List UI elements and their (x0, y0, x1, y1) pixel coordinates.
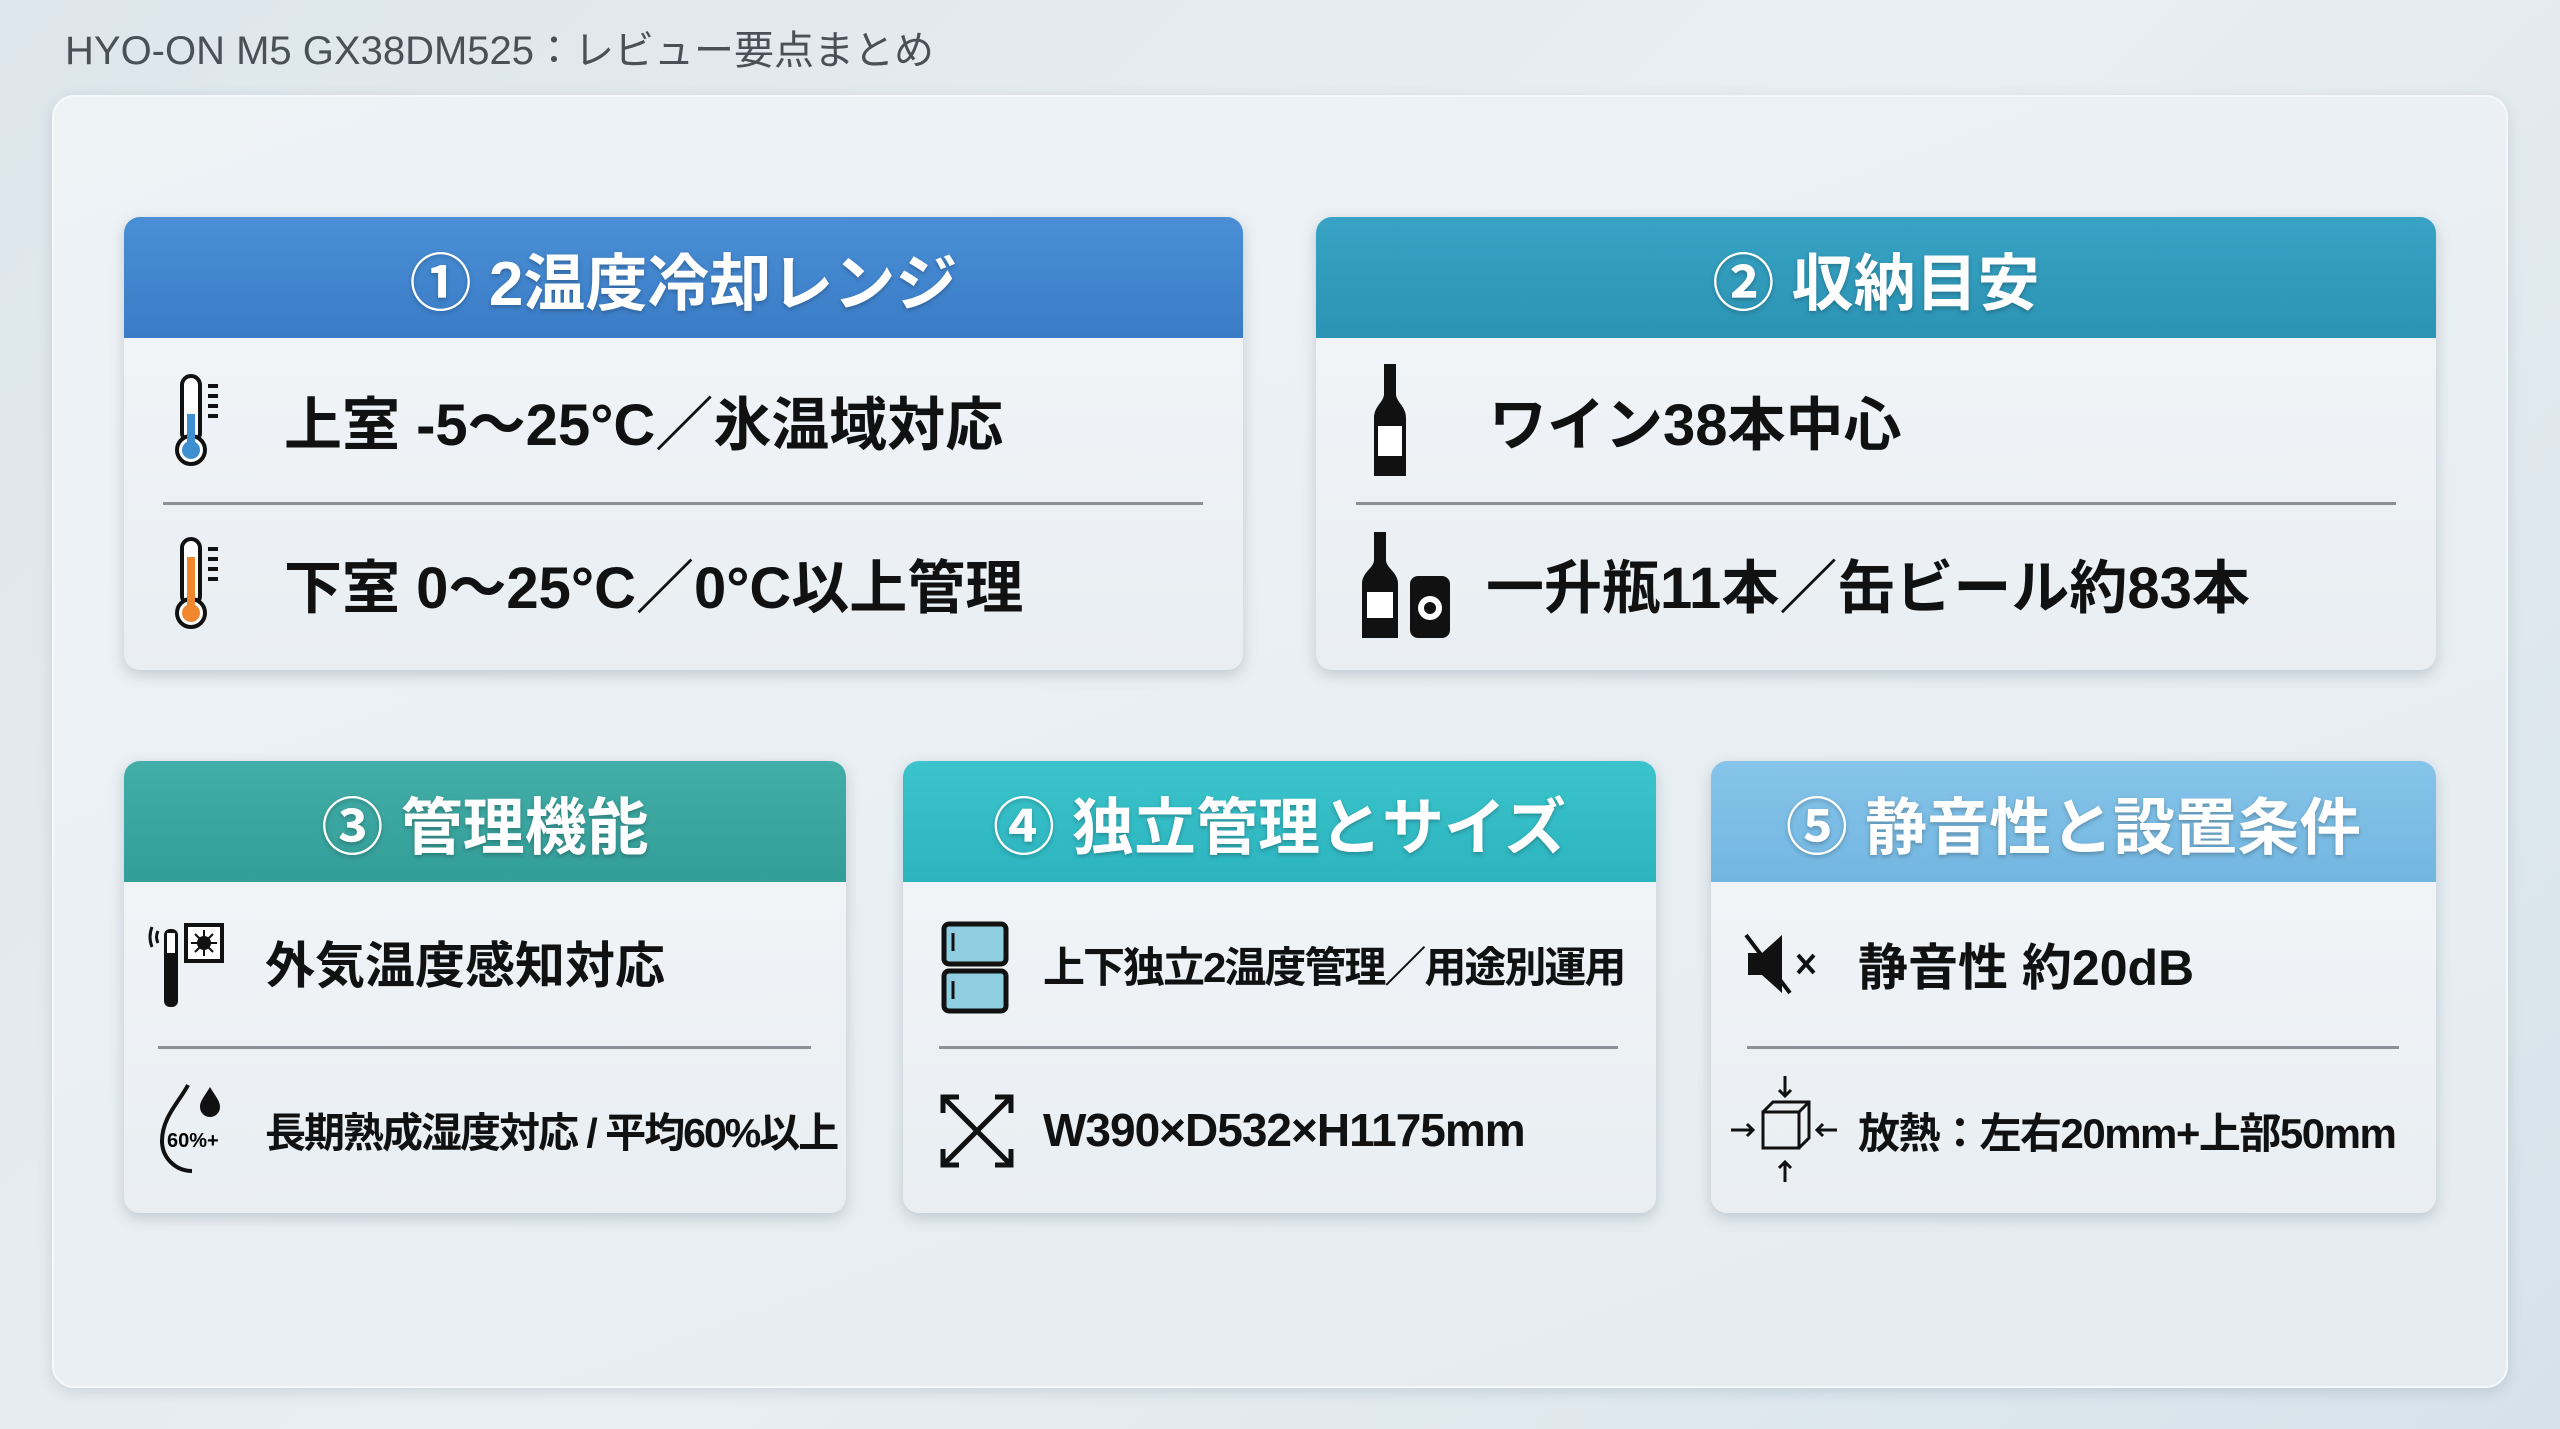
icon: sensor (148, 923, 224, 1007)
icon: mute speaker (1744, 934, 1816, 994)
text: quiet: 静音性 約20dB (1858, 940, 2194, 996)
text: outside temp sensing: 外気温度感知対応 (265, 938, 665, 994)
icon: ventilation box (1731, 1076, 1837, 1182)
text: independent management: 上下独立2温度管理／用途別運用 (1043, 944, 1624, 990)
heading 2: ② 収納目安 (1712, 250, 2040, 318)
text: lower chamber: 下室 0〜25°C／0°C以上管理 (284, 556, 1023, 621)
panel: cooling range (124, 217, 1243, 670)
panel: quiet and installation (1711, 761, 2436, 1213)
heading 4: ④ 独立管理とサイズ (993, 794, 1566, 862)
panel: management (124, 761, 846, 1213)
panel: storage (1316, 217, 2436, 670)
text: wine: ワイン38本中心 (1489, 393, 1902, 458)
icon: humidity: 60%+ (167, 1130, 219, 1152)
icon: wine bottle (1374, 364, 1406, 476)
icon: dimension arrows (940, 1094, 1014, 1168)
text: size: W390×D532×H1175mm (1043, 1104, 1525, 1156)
heading 5: ⑤ 静音性と設置条件 (1786, 794, 2361, 862)
heading 3: ③ 管理機能 (321, 794, 649, 862)
heading 5 (1711, 761, 2436, 882)
text: humidity: 長期熟成湿度対応 / 平均60%以上 (265, 1110, 837, 1156)
icon: thermometer blue (175, 374, 218, 466)
panel: independent and size (903, 761, 1656, 1213)
heading 2 (1316, 217, 2436, 338)
icon: humidity (160, 1084, 220, 1173)
text: sake and beer: 一升瓶11本／缶ビール約83本 (1486, 556, 2250, 621)
icon: sake bottle and can (1362, 532, 1450, 638)
heading 3 (124, 761, 846, 882)
text: upper chamber: 上室 -5〜25°C／氷温域対応 (284, 393, 1003, 458)
icon: thermometer orange (175, 537, 218, 629)
heading 1 (124, 217, 1243, 338)
title: HYO-ON M5 GX38DM525：レビュー要点まとめ (65, 29, 934, 73)
heading 1: ① 2温度冷却レンジ (410, 250, 957, 318)
text: heat dissipation: 放熱：左右20mm+上部50mm (1858, 1110, 2395, 1156)
heading 4 (903, 761, 1656, 882)
icon: two-door fridge (942, 922, 1008, 1014)
